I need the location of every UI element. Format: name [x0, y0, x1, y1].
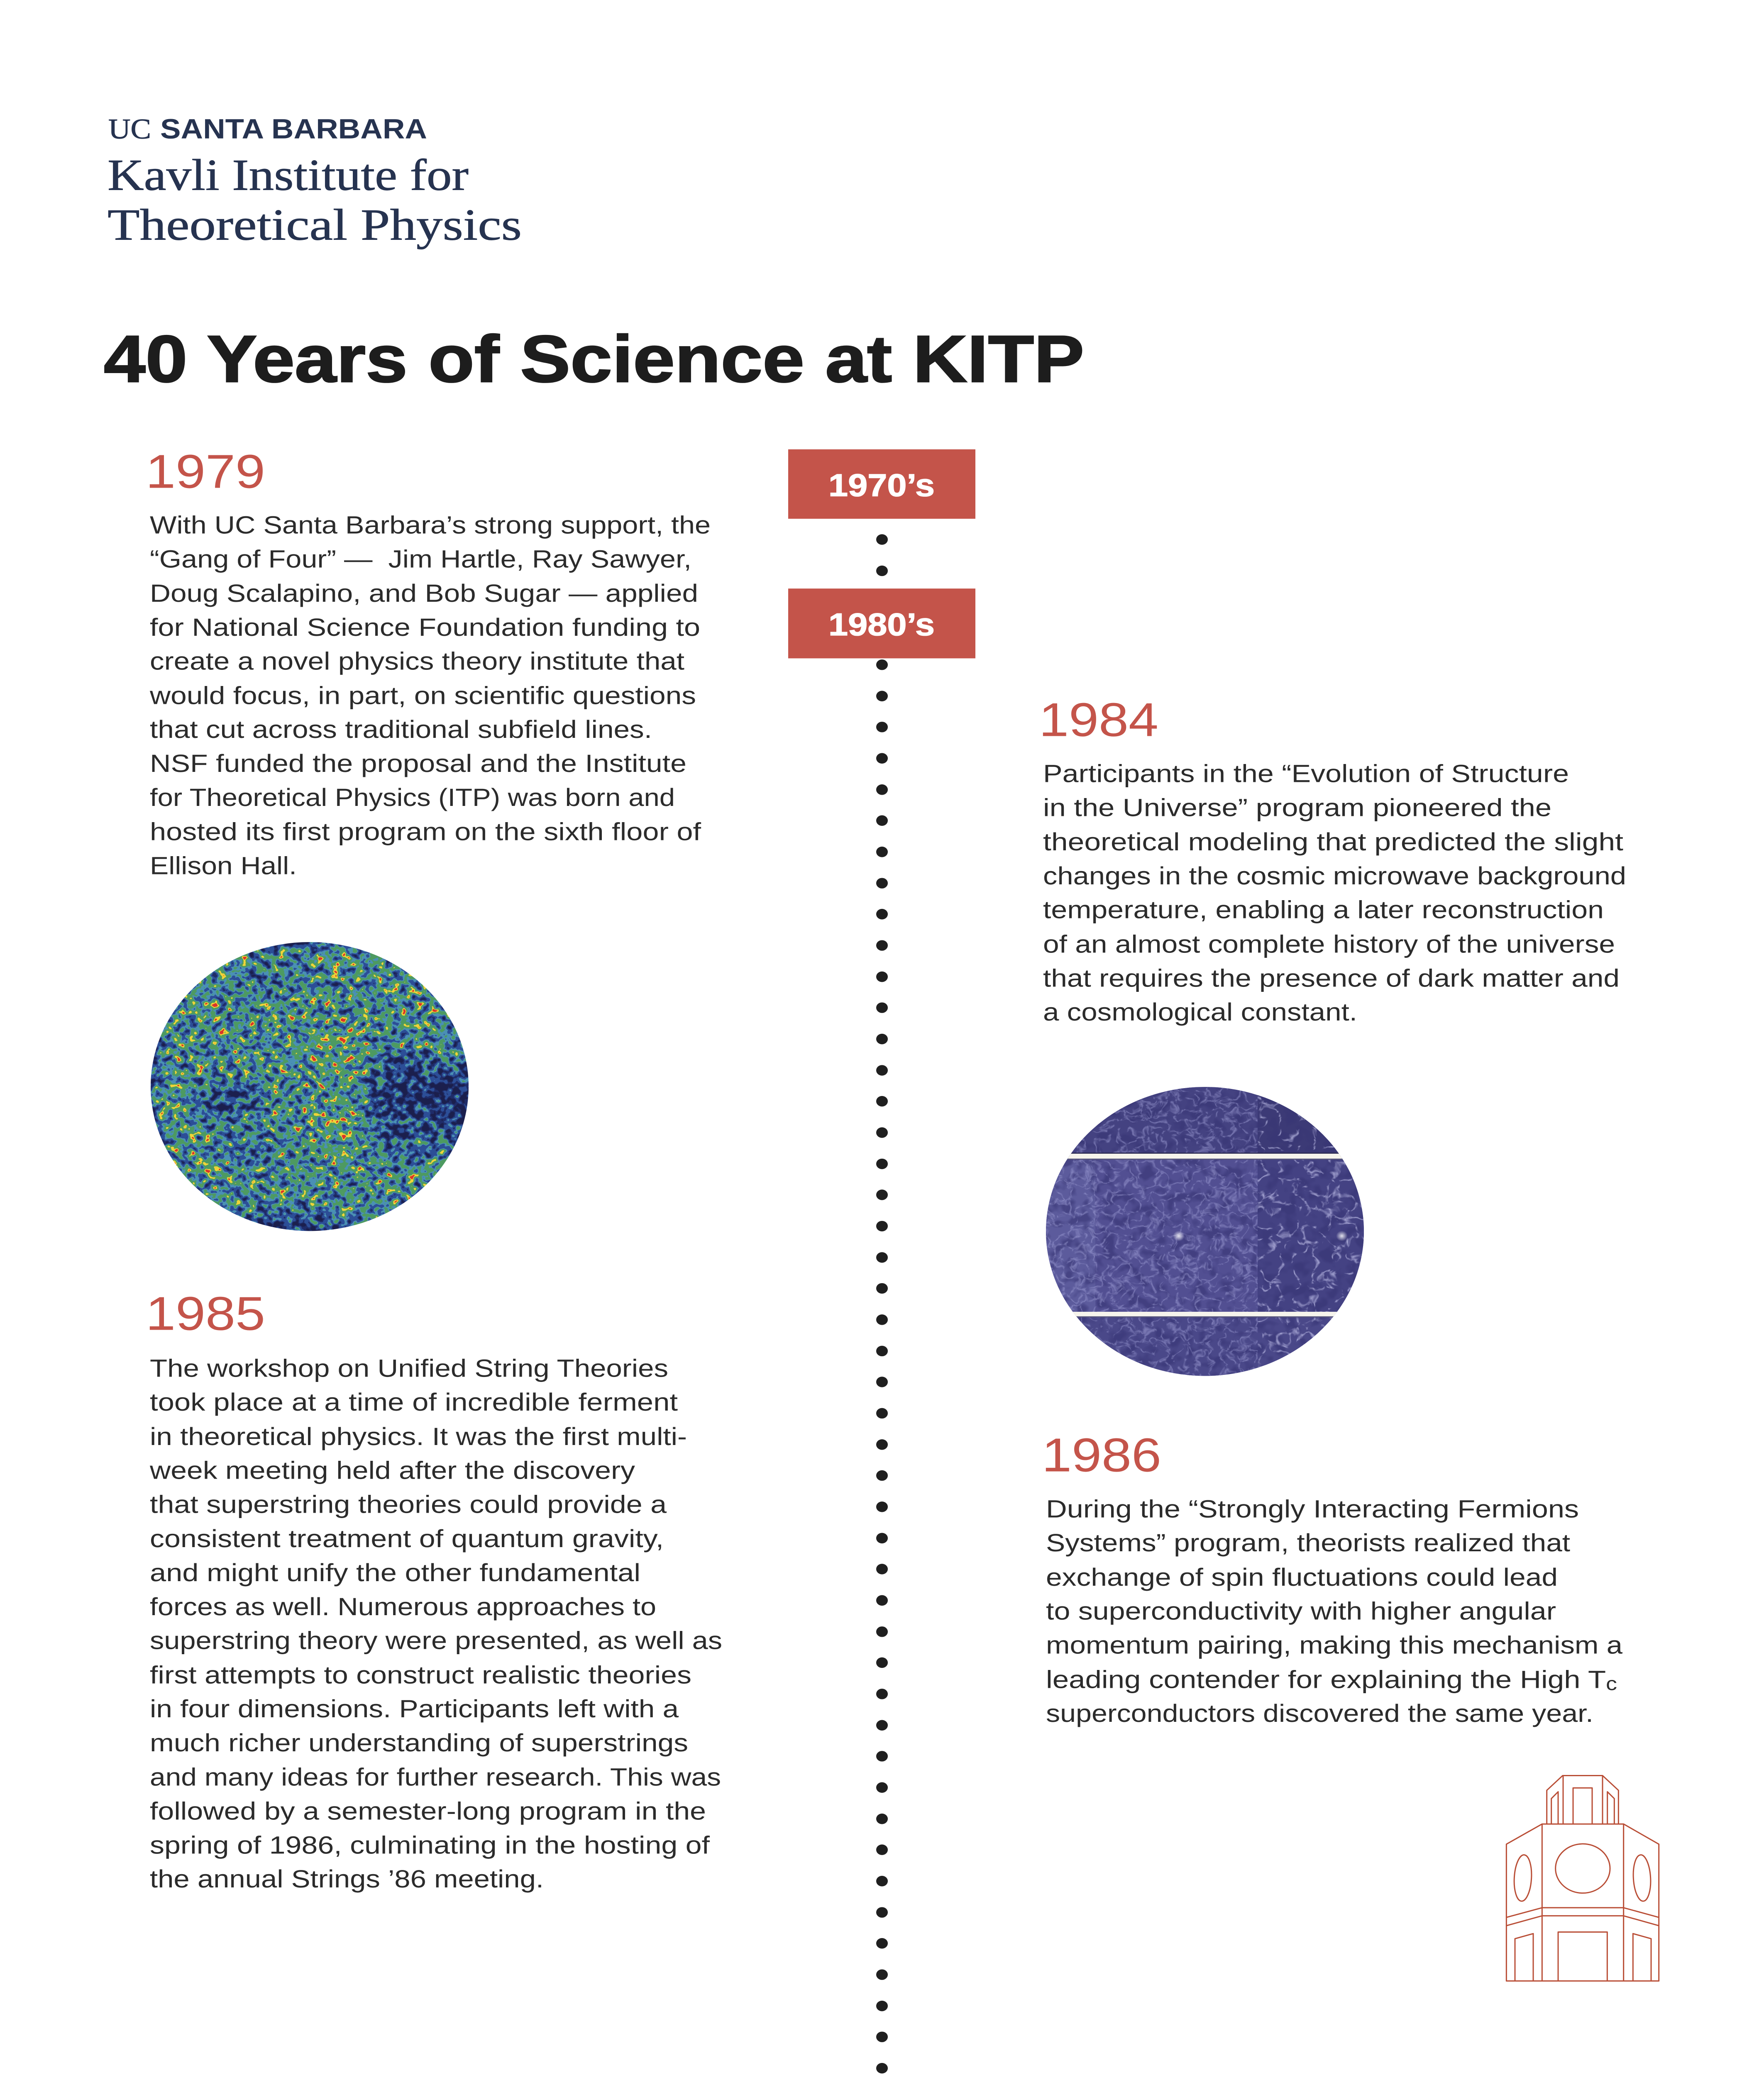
text block 1979: that cut across traditional subfield lines.: [150, 715, 652, 743]
panel: 1986: [1042, 1428, 1622, 1727]
image: cosmic microwave background sphere: [151, 942, 469, 1231]
decade label: 1980's: [788, 588, 975, 658]
text block 1979: Doug Scalapino, and Bob Sugar — applied: [150, 579, 698, 607]
text block 1985: and many ideas for further research. This was: [150, 1763, 721, 1791]
decade label: 1970's: 1970’s: [828, 467, 935, 503]
text block 1984: Participants in the “Evolution of Structure: [1043, 759, 1569, 787]
panel: 1985: [146, 1287, 722, 1893]
panel: 1984: [1039, 693, 1626, 1026]
year heading 1986: 1986: [1042, 1428, 1161, 1482]
text block 1984: theoretical modeling that predicted the slight: [1043, 828, 1623, 856]
text block 1985: consistent treatment of quantum gravity,: [150, 1525, 664, 1553]
text block 1986: exchange of spin fluctuations could lead: [1046, 1563, 1558, 1591]
title: 40 Years of Science at KITP: [104, 322, 1084, 396]
logo: Kavli Institute for Theoretical Physics: Kavli Institute for: [108, 150, 469, 200]
text block 1985: the annual Strings ’86 meeting.: [150, 1865, 544, 1893]
text block 1985: and might unify the other fundamental: [150, 1558, 640, 1587]
year heading 1979: 1979: [146, 445, 265, 498]
text block 1986: c: [1606, 1673, 1617, 1694]
text block 1984: a cosmological constant.: [1043, 998, 1357, 1026]
text block 1986: [1046, 1495, 1622, 1727]
logo: Kavli Institute for Theoretical Physics: [108, 150, 522, 249]
decade label: 1980's: 1980’s: [828, 607, 935, 642]
text block 1979: [149, 511, 711, 879]
text block 1985: that superstring theories could provide a: [150, 1490, 667, 1518]
text block 1985: in four dimensions. Participants left with a: [150, 1695, 679, 1723]
text block 1985: much richer understanding of superstrings: [150, 1728, 688, 1757]
text block 1986: Systems” program, theorists realized that: [1046, 1529, 1570, 1557]
logo: UC Santa Barbara wordmark: SANTA BARBARA: [160, 113, 427, 144]
text block 1984: that requires the presence of dark matter and: [1043, 964, 1620, 992]
text block 1979: for Theoretical Physics (ITP) was born and: [150, 783, 675, 811]
text block 1985: followed by a semester-long program in the: [150, 1797, 706, 1825]
year heading 1985: 1985: [146, 1287, 265, 1340]
text block 1979: hosted its first program on the sixth floor of: [150, 818, 701, 845]
text block 1986: momentum pairing, making this mechanism a: [1046, 1631, 1622, 1659]
text block 1979: create a novel physics theory institute that: [150, 647, 684, 675]
timeline dots: [876, 534, 888, 2073]
text block 1984: [1043, 759, 1626, 1026]
logo: UC Santa Barbara wordmark: UC: [108, 113, 151, 145]
text block 1984: in the Universe” program pioneered the: [1043, 793, 1551, 821]
text block 1979: for National Science Foundation funding to: [150, 613, 700, 641]
text block 1986: superconductors discovered the same year.: [1046, 1699, 1593, 1727]
image: dark matter simulation circle: [1046, 1087, 1364, 1376]
text block 1984: temperature, enabling a later reconstruction: [1043, 896, 1604, 923]
text block 1985: forces as well. Numerous approaches to: [150, 1592, 656, 1621]
text block 1986: leading contender for explaining the High T: [1046, 1665, 1568, 1693]
text block 1985: superstring theory were presented, as well as: [150, 1626, 722, 1654]
text block 1985: [149, 1354, 722, 1893]
text block 1984: of an almost complete history of the universe: [1043, 930, 1615, 958]
year heading 1984: 1984: [1039, 693, 1158, 746]
text block 1979: NSF funded the proposal and the Institute: [150, 749, 687, 777]
panel: 1979: [146, 445, 711, 879]
logo: Kavli Institute for Theoretical Physics: Theoretical Physics: [108, 200, 522, 249]
icon: Kohn Hall tower line drawing: [1506, 1775, 1659, 1981]
text block 1985: The workshop on Unified String Theories: [150, 1354, 668, 1382]
text block 1985: week meeting held after the discovery: [149, 1456, 635, 1484]
text block 1985: spring of 1986, culminating in the hosting of: [150, 1831, 710, 1859]
decade label: 1970's: [788, 449, 975, 519]
text block 1979: With UC Santa Barbara’s strong support, the: [150, 511, 711, 539]
text block 1985: in theoretical physics. It was the first multi-: [150, 1422, 687, 1450]
text block 1979: Ellison Hall.: [150, 852, 297, 879]
text block 1986: to superconductivity with higher angular: [1046, 1597, 1556, 1625]
text block 1979: would focus, in part, on scientific questions: [149, 681, 696, 709]
text block 1985: took place at a time of incredible ferment: [150, 1388, 678, 1416]
text block 1985: first attempts to construct realistic theories: [150, 1661, 691, 1689]
text block 1984: changes in the cosmic microwave background: [1043, 862, 1626, 890]
text block 1979: “Gang of Four” — Jim Hartle, Ray Sawyer,: [150, 545, 691, 573]
text block 1986: During the “Strongly Interacting Fermions: [1046, 1495, 1579, 1523]
